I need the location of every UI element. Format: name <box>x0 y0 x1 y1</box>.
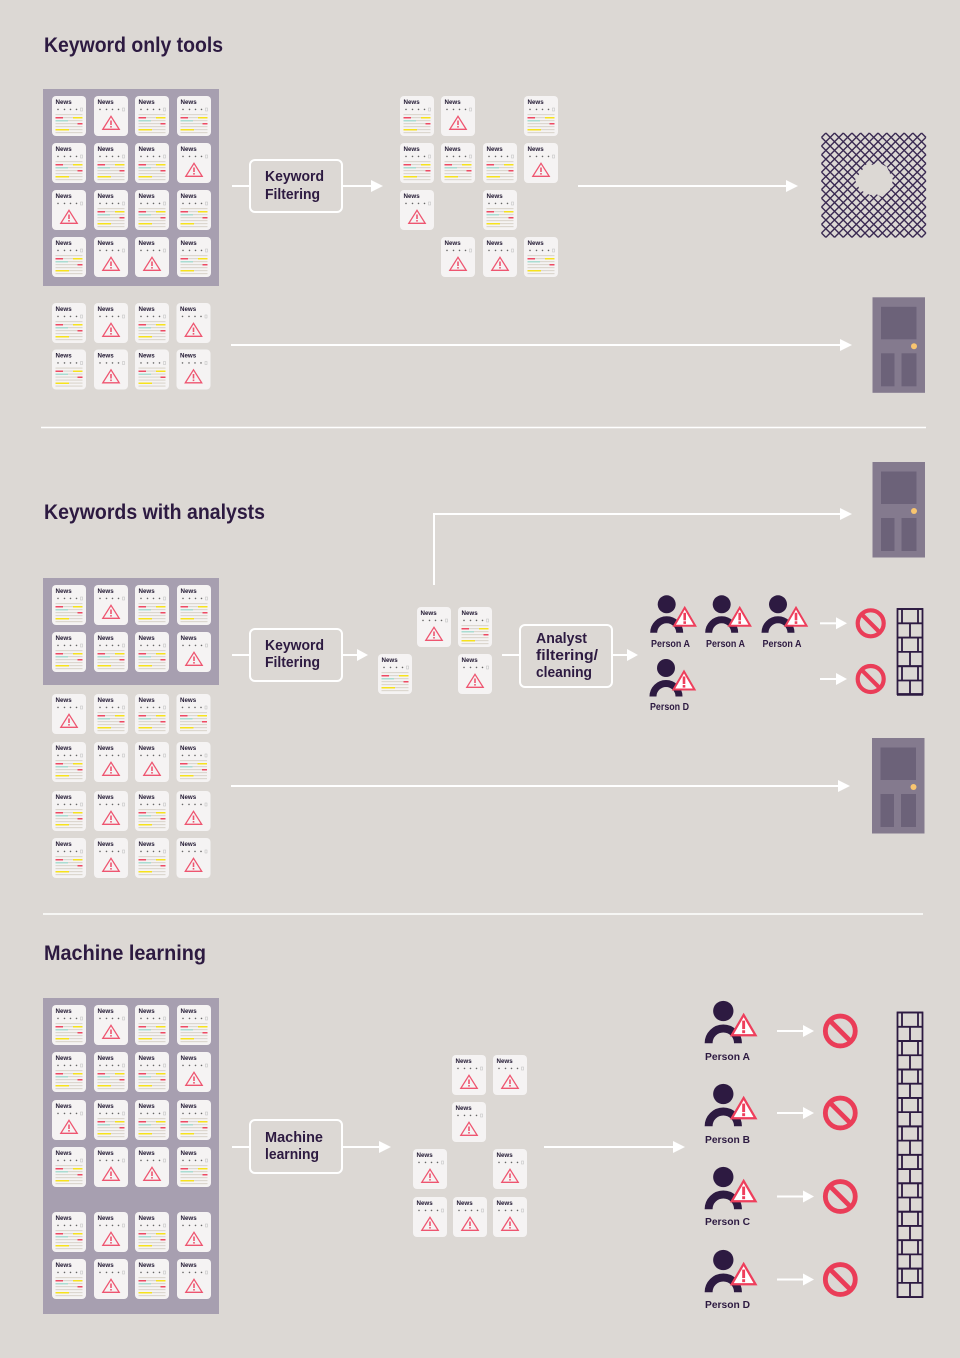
panel: news input 3: News <box>56 1262 72 1269</box>
panel: news input 3: News <box>180 1103 197 1110</box>
arrow: to door <box>231 339 852 351</box>
icon: door 3 <box>872 738 924 834</box>
unfiltered news cards 2: News <box>56 794 72 801</box>
panel: news input: News <box>138 635 155 642</box>
unfiltered news cards 2: News <box>56 841 72 848</box>
unfiltered news cards 2: News <box>138 841 155 848</box>
title: machine learning: Machine learning <box>44 942 206 965</box>
box: analyst filtering: Analyst <box>536 630 587 647</box>
filtered news cards: News <box>404 146 420 153</box>
arrow and ban c <box>777 1182 855 1211</box>
person a 2: Person A <box>706 639 745 650</box>
filtered news cards: News <box>404 99 420 106</box>
person c <box>705 1167 756 1228</box>
panel: news input 3: News <box>98 1262 114 1269</box>
unfiltered news cards 2: News <box>98 794 114 801</box>
panel: news input 3: News <box>180 1150 197 1157</box>
filtered news cards: News <box>444 240 461 247</box>
box: keyword filtering 2: Filtering <box>265 654 320 671</box>
panel: all news input: News <box>56 193 72 200</box>
unfiltered news cards: News <box>138 306 155 313</box>
box: keyword filtering: Filtering <box>265 186 320 203</box>
filtered news cards: News <box>444 99 461 106</box>
filtered news cards 2 <box>378 607 492 694</box>
filtered news cards: News <box>486 240 503 247</box>
unfiltered news cards: News <box>138 352 155 360</box>
unfiltered news cards: News <box>180 306 197 313</box>
person a 3 <box>762 595 806 650</box>
panel: news input 3: News <box>138 1262 155 1269</box>
box: machine learning: Machine <box>265 1129 323 1146</box>
filtered news cards <box>400 96 558 277</box>
person a 2 <box>706 595 750 650</box>
panel: all news input: News <box>56 99 72 106</box>
panel: news input 3: News <box>180 1008 197 1015</box>
arrow: up to door <box>434 508 852 585</box>
person b <box>705 1084 756 1146</box>
arrow and ban 2 <box>820 666 884 692</box>
panel: all news input: News <box>138 146 155 153</box>
person a 1 <box>651 595 695 650</box>
panel: all news input: News <box>180 193 197 200</box>
box: analyst filtering: cleaning <box>536 664 592 681</box>
box: analyst filtering: filtering/ <box>536 647 599 664</box>
panel: all news input: News <box>98 146 114 153</box>
panel: news input 3: News <box>56 1215 72 1222</box>
box: keyword filtering 2 <box>250 629 342 681</box>
filtered news cards 3: News <box>456 1058 472 1065</box>
filtered news cards: News <box>528 99 544 106</box>
filtered news cards 3: News <box>416 1200 433 1207</box>
panel: all news input: News <box>138 240 155 247</box>
panel: news input 3: News <box>180 1215 197 1222</box>
panel: news input 3: News <box>138 1055 155 1062</box>
panel: all news input: News <box>180 99 197 106</box>
panel: news input 3: News <box>138 1150 155 1157</box>
filtered news cards: News <box>528 146 544 153</box>
panel: news input: News <box>56 588 72 595</box>
panel: news input 3: News <box>98 1008 114 1015</box>
unfiltered news cards: News <box>98 306 114 313</box>
person a 1: Person A <box>651 639 690 650</box>
filtered news cards: News <box>404 193 420 200</box>
filtered news cards 3: News <box>496 1200 513 1207</box>
unfiltered news cards 2: News <box>138 745 155 752</box>
filtered news cards 3: News <box>456 1200 473 1207</box>
box: analyst filtering <box>520 625 612 687</box>
person d: Person D <box>650 702 689 713</box>
box: machine learning <box>250 1120 342 1173</box>
unfiltered news cards 2: News <box>98 841 114 848</box>
arrow and ban a <box>777 1016 855 1046</box>
unfiltered news cards: News <box>180 352 197 360</box>
unfiltered news cards 2: News <box>138 794 155 801</box>
arrow and ban b <box>777 1098 855 1128</box>
panel: all news input: News <box>180 146 197 153</box>
arrow: into analyst box <box>502 654 520 656</box>
panel: news input: News <box>138 588 155 595</box>
panel: news input 3 <box>43 998 219 1314</box>
panel: news input: News <box>98 588 114 595</box>
filtered news cards: News <box>486 146 503 153</box>
panel: all news input: News <box>138 99 155 106</box>
person d <box>705 1250 756 1311</box>
filtered news cards: News <box>528 240 544 247</box>
panel: all news input: News <box>138 193 155 200</box>
box: keyword filtering: Keyword <box>265 168 324 185</box>
filtered news cards: News <box>444 146 461 153</box>
arrow: into keyword filtering 2 <box>232 649 368 661</box>
arrow and ban 1 <box>820 610 884 636</box>
unfiltered news cards: News <box>56 306 72 313</box>
box: keyword filtering <box>250 160 342 212</box>
unfiltered news cards 2: News <box>180 794 197 801</box>
panel: news input 3: News <box>56 1150 72 1157</box>
arrow: to analysts <box>612 649 638 661</box>
unfiltered news cards 2 <box>52 694 210 878</box>
filtered news cards 2: News <box>382 657 398 664</box>
panel: news input: News <box>180 635 197 642</box>
panel: news input 3: News <box>180 1055 197 1062</box>
filtered news cards 3: News <box>456 1105 472 1112</box>
person d: Person D <box>705 1300 750 1311</box>
panel: news input <box>43 578 219 685</box>
panel: news input 3: News <box>56 1103 72 1110</box>
filtered news cards 2: News <box>420 610 437 617</box>
panel: news input: News <box>180 588 197 595</box>
filtered news cards 3: News <box>496 1058 513 1065</box>
unfiltered news cards: News <box>98 352 114 360</box>
panel: all news input: News <box>56 240 72 247</box>
panel: all news input: News <box>98 193 114 200</box>
unfiltered news cards 2: News <box>180 745 197 752</box>
panel: news input 3: News <box>180 1262 197 1269</box>
unfiltered news cards 2: News <box>180 841 197 848</box>
unfiltered news cards 2: News <box>98 697 114 704</box>
panel: news input 3: News <box>56 1055 72 1062</box>
filtered news cards: News <box>486 193 503 200</box>
unfiltered news cards 2: News <box>138 697 155 704</box>
panel: news input 3: News <box>56 1008 72 1015</box>
panel: all news input: News <box>98 240 114 247</box>
panel: news input 3: News <box>98 1150 114 1157</box>
title: keywords with analysts: Keywords with analysts <box>44 501 265 524</box>
panel: all news input: News <box>98 99 114 106</box>
icon: brick wall tall <box>897 1012 923 1297</box>
panel: news input 3: News <box>98 1215 114 1222</box>
panel: news input 3: News <box>138 1008 155 1015</box>
panel: news input: News <box>98 635 114 642</box>
unfiltered news cards: News <box>56 352 72 360</box>
person c: Person C <box>705 1217 750 1228</box>
box: keyword filtering 2: Keyword <box>265 637 324 654</box>
panel: all news input: News <box>180 240 197 247</box>
title: keyword only tools: Keyword only tools <box>44 34 223 57</box>
arrow: to persons <box>544 1141 685 1153</box>
filtered news cards 2: News <box>462 657 478 664</box>
arrow: into machine learning <box>232 1141 391 1153</box>
panel: all news input <box>43 89 219 286</box>
box: machine learning: learning <box>265 1146 319 1163</box>
arrow: to door 3 <box>231 780 850 792</box>
person a <box>705 1001 756 1063</box>
filtered news cards 3 <box>413 1055 527 1237</box>
unfiltered news cards 2: News <box>180 697 197 704</box>
panel: news input 3: News <box>138 1215 155 1222</box>
icon: door top <box>872 462 925 558</box>
arrow and ban d <box>777 1265 855 1294</box>
icon: mesh with hole <box>822 133 926 237</box>
panel: news input 3: News <box>98 1103 114 1110</box>
arrow: to mesh <box>578 180 798 192</box>
arrow: into keyword filtering <box>232 180 383 192</box>
filtered news cards 2: News <box>462 610 478 617</box>
panel: news input: News <box>56 635 72 642</box>
unfiltered news cards <box>52 303 210 390</box>
unfiltered news cards 2: News <box>56 745 72 752</box>
person a 3: Person A <box>762 639 802 650</box>
filtered news cards 3: News <box>416 1152 433 1159</box>
unfiltered news cards 2: News <box>98 745 114 752</box>
panel: all news input: News <box>56 146 72 153</box>
filtered news cards 3: News <box>496 1152 513 1159</box>
panel: news input 3: News <box>98 1055 114 1062</box>
person a: Person A <box>705 1052 750 1063</box>
panel: news input 3: News <box>138 1103 155 1110</box>
icon: door <box>872 297 925 393</box>
icon: brick wall small <box>897 609 923 695</box>
person d <box>650 659 694 713</box>
person b: Person B <box>705 1135 750 1146</box>
unfiltered news cards 2: News <box>56 697 72 704</box>
